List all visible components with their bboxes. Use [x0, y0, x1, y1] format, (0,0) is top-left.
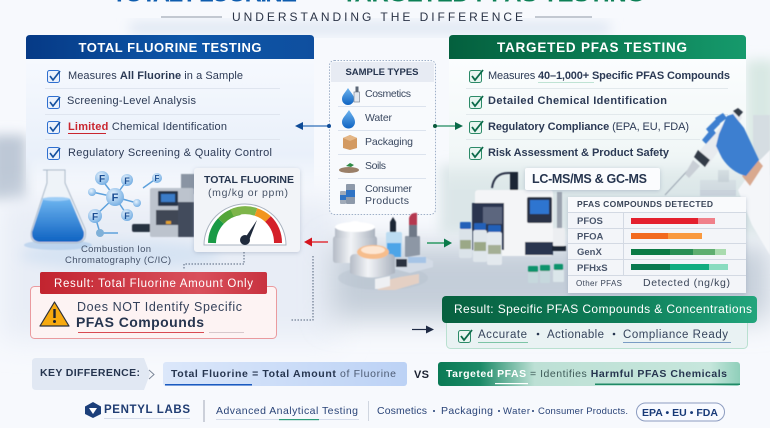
row: PFOA — [577, 232, 702, 242]
panel header — [26, 35, 314, 59]
panel: total fluorine result: PFAS Compounds — [76, 314, 204, 330]
icon: check — [458, 330, 472, 342]
sample types heading — [331, 62, 434, 82]
panel: total fluorine result: Does NOT Identify Specific — [77, 300, 242, 314]
key difference: total fluorine — [163, 362, 407, 386]
logo: Pentyl Labs — [85, 402, 190, 419]
result banner: Result: Specific PFAS Compounds & Concentrations — [454, 302, 752, 316]
panel: total fluorine result — [30, 272, 276, 338]
arrow: to targeted PFAS panel — [433, 122, 463, 130]
logo: Pentyl Labs: PENTYL LABS — [104, 404, 190, 416]
footer: applications: Packaging — [441, 405, 493, 417]
card: total fluorine gauge: (mg/kg or ppm) — [208, 187, 288, 199]
row: other PFAS: Other PFAS — [576, 279, 622, 288]
subtitle: UNDERSTANDING THE DIFFERENCE — [232, 10, 523, 24]
connector: dotted cosmetics to result — [290, 256, 313, 320]
checklist item 1: Measures 40–1,000+ Specific PFAS Compounds — [488, 70, 730, 82]
sample: packaging — [343, 135, 413, 150]
panel: targeted PFAS testing — [449, 35, 746, 190]
illustration: fluorine molecule: F — [124, 176, 130, 186]
checklist item 3: Regulatory Compliance (EPA, EU, FDA) — [488, 121, 689, 133]
footer: applications — [377, 405, 628, 417]
label: LC-MS/MS and GC-MS: LC-MS/MS & GC-MS — [532, 172, 647, 186]
key difference label — [32, 358, 154, 390]
result banner: Result: Total Fluorine Amount Only — [54, 278, 253, 290]
illustration: LC-MS instrument — [472, 172, 566, 256]
checklist item 3: Limited Chemical Identification — [68, 121, 227, 133]
sample: consumer products: Consumer — [365, 183, 412, 195]
panel: total fluorine testing — [26, 35, 314, 195]
row: GenX — [577, 247, 726, 258]
card: total fluorine gauge — [194, 168, 300, 252]
row: GenX: GenX — [577, 247, 602, 258]
label: combustion ion chromatography: Combustion Ion — [81, 244, 151, 255]
footer: applications: Water — [503, 406, 530, 417]
illustration: cosmetics — [333, 213, 433, 290]
table: PFAS compounds detected — [568, 197, 746, 293]
result banner — [442, 296, 757, 323]
table: PFAS compounds detected: PFAS COMPOUNDS DETECTED — [577, 199, 713, 209]
panel: targeted PFAS result: Compliance Ready — [623, 329, 728, 341]
footer: applications: Consumer Products. — [538, 406, 628, 417]
panel header: TARGETED PFAS TESTING — [497, 40, 687, 55]
illustration: fluorine molecule — [88, 171, 162, 237]
icon: warning triangle — [40, 302, 69, 326]
label: LC-MS/MS and GC-MS — [525, 168, 660, 190]
arrow: cosmetics to instrument — [427, 238, 452, 248]
panel header: TOTAL FLUORINE TESTING — [78, 40, 262, 55]
illustration: combustion instrument — [132, 174, 196, 237]
title — [112, 0, 645, 8]
panel: targeted PFAS result — [442, 296, 757, 348]
illustration: fluorine molecule: F — [99, 174, 105, 185]
sample: cosmetics: Cosmetics — [365, 88, 411, 100]
illustration: fluorine molecule: F — [112, 192, 119, 204]
connector: gauge to result — [184, 252, 244, 270]
row: PFOS: PFOS — [577, 216, 603, 227]
card: total fluorine gauge: TOTAL FLUORINE — [204, 174, 294, 186]
illustration: sample vials — [459, 222, 564, 283]
checklist item 4: Risk Assessment & Product Safety — [488, 147, 670, 159]
label: combustion ion chromatography — [65, 244, 171, 266]
label: combustion ion chromatography: Chromatography (C/IC) — [65, 255, 171, 266]
key difference: total fluorine: Total Fluorine = Total Amount of Fluorine — [171, 368, 396, 380]
vs label: VS — [414, 369, 429, 381]
result banner — [40, 272, 267, 294]
checklist item 1: Measures All Fluorine in a Sample — [68, 70, 243, 82]
row: other PFAS: Detected (ng/kg) — [643, 277, 730, 289]
illustration: flask — [24, 170, 92, 250]
key difference label: KEY DIFFERENCE: — [40, 367, 140, 379]
key difference: targeted PFAS — [438, 362, 740, 386]
sample: cosmetics — [342, 86, 411, 105]
row: PFHxS — [577, 263, 728, 274]
footer: advanced analytical testing: Advanced Analytical Testing — [216, 405, 358, 417]
illustration: fluorine molecule: F — [124, 211, 130, 221]
illustration: fluorine molecule: F — [155, 174, 160, 183]
panel: sample types — [330, 60, 436, 214]
sample: consumer products: Products — [365, 195, 409, 207]
checklist item 2: Screening-Level Analysis — [67, 95, 196, 107]
checklist item 4: Regulatory Screening & Quality Control — [68, 147, 272, 159]
badge: EPA EU FDA — [636, 403, 724, 421]
row: other PFAS — [576, 277, 730, 289]
arrow: cosmetics to gauge — [304, 238, 328, 246]
row: PFOS — [577, 216, 715, 227]
arrow: to total fluorine panel — [295, 122, 331, 130]
row: PFOA: PFOA — [577, 232, 604, 242]
footer: applications: Cosmetics — [377, 405, 427, 417]
illustration: fluorine molecule: F — [92, 212, 98, 223]
sample: soils — [339, 160, 386, 173]
lab shelf backdrop — [700, 115, 770, 196]
checklist item 2: Detailed Chemical Identification — [488, 95, 667, 107]
key difference: targeted PFAS: Targeted PFAS = Identifies Harmful PFAS Chemicals — [446, 368, 727, 380]
panel: targeted PFAS result: Actionable — [547, 329, 604, 341]
panel header — [449, 35, 746, 59]
sample: water — [342, 110, 392, 128]
arrow: to green result — [412, 326, 434, 334]
panel: targeted PFAS result: Accurate — [478, 329, 527, 341]
illustration: pipette and gloved hand — [665, 108, 770, 255]
sample types heading: SAMPLE TYPES — [346, 67, 418, 78]
sample: soils: Soils — [365, 160, 386, 172]
sample: water: Water — [365, 112, 392, 124]
sample: consumer products — [340, 183, 412, 207]
gauge — [204, 204, 286, 245]
row: PFHxS: PFHxS — [577, 263, 608, 274]
badge: EPA EU FDA: EPA • EU • FDA — [642, 407, 718, 419]
sample: packaging: Packaging — [365, 136, 413, 148]
